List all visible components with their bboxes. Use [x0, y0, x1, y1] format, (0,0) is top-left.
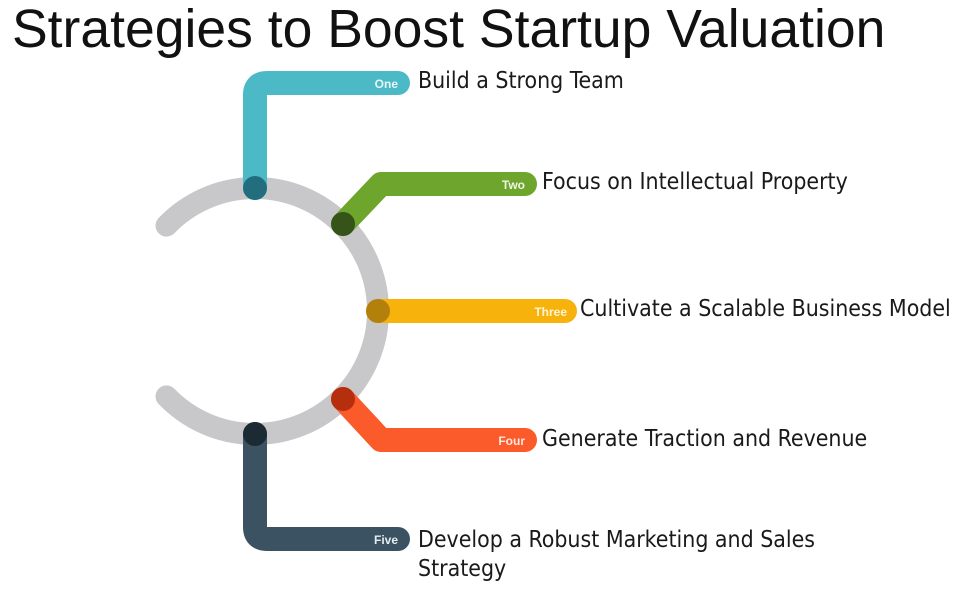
label five: Strategy — [418, 556, 506, 582]
label five — [418, 527, 815, 582]
label five: Develop a Robust Marketing and Sales — [418, 527, 815, 553]
branch three: Three — [534, 305, 567, 319]
label four: Generate Traction and Revenue — [542, 426, 867, 452]
label two: Focus on Intellectual Property — [542, 169, 848, 195]
gray arc — [166, 188, 378, 434]
branch four — [331, 387, 525, 448]
branch one — [243, 77, 398, 200]
branch two — [331, 178, 525, 236]
branch five: Five — [374, 533, 398, 547]
label three: Cultivate a Scalable Business Model — [580, 296, 951, 322]
branch one: One — [375, 77, 398, 91]
branch two: Two — [502, 178, 525, 192]
branch four: Four — [498, 434, 525, 448]
label one: Build a Strong Team — [418, 68, 624, 94]
title: Strategies to Boost Startup Valuation — [12, 0, 885, 59]
branch five — [243, 422, 398, 547]
branch three — [366, 299, 567, 323]
